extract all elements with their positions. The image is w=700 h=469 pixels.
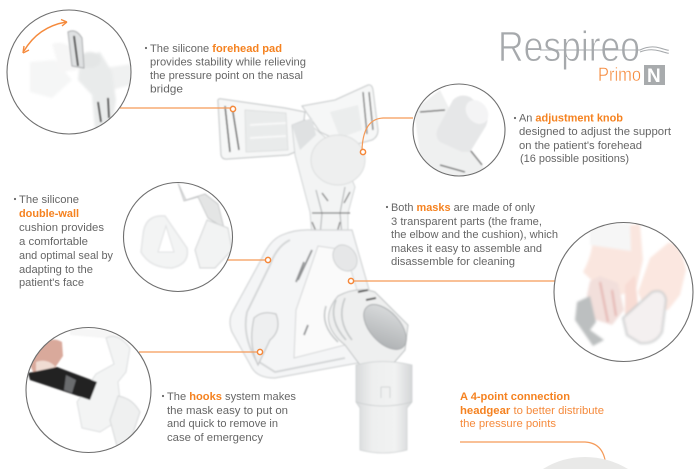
mask part: left forehead pad [218,99,305,159]
logo: Respireo Primo N: Primo [598,65,641,86]
text block: forehead pad [145,43,306,96]
photo circle: forehead pad [7,10,134,134]
text block: masks: disassemble for cleaning [391,256,515,268]
text block: headgear [460,391,604,430]
text block: double-wall cushion: double-wall [19,208,79,220]
connector line: forehead pad [120,106,236,112]
text block: double-wall cushion: adapting to the [19,264,93,276]
text block: forehead pad: bridge [150,84,183,96]
text block: masks [386,202,558,268]
text block: masks: 3 transparent parts (the frame, [391,216,542,228]
connector line: adjustment knob [360,118,413,155]
mask part: elbow [324,290,408,365]
text block: double-wall cushion: a comfortable [19,236,88,248]
mask part: forehead support column [292,118,355,236]
text block: adjustment knob: designed to adjust the support [519,126,671,138]
text block: headgear: A 4-point connection [460,391,570,403]
text block: hooks [162,391,296,444]
photo circle: double-wall cushion [124,182,232,292]
logo: Respireo Primo N: Respireo [498,23,640,71]
logo: Respireo Primo N: N [647,66,661,87]
text block: forehead pad: The silicone forehead pad [150,43,282,55]
main product: transparent nasal mask [218,85,414,453]
text block: forehead pad: provides stability while relieving [150,56,306,68]
mask part: right forehead pad [302,85,378,146]
mask part: adjustment knob [311,135,365,185]
icon: curved double arrow [23,20,67,53]
connector line: double-wall cushion [227,257,271,263]
text block: double-wall cushion: The silicone [19,194,79,206]
grey circle cropped at bottom edge [543,457,628,469]
text block: double-wall cushion [14,194,113,289]
mask part: exhaust vent plate [356,297,414,357]
text block: masks: the elbow and the cushion), which [391,229,558,241]
text block: hooks: The hooks system makes [167,391,296,403]
text block: hooks: and quick to remove in [167,418,278,430]
photo circle: hooks with hand and strap [26,328,151,452]
text block: hooks: the mask easy to put on [167,405,288,417]
text block: masks: makes it easy to assemble and [391,243,542,255]
text block: forehead pad: the pressure point on the nasal [150,70,303,82]
text block: double-wall cushion: and optimal seal by [19,250,113,262]
text block: adjustment knob: (16 possible positions) [520,153,629,165]
text block: adjustment knob: An adjustment knob [519,112,623,124]
mask part: swivel connector [356,362,412,453]
text block: masks: Both masks are made of only [391,202,535,214]
text block: double-wall cushion: cushion provides [19,222,105,234]
text block: adjustment knob [514,112,671,165]
text block: headgear: the pressure points [460,418,557,430]
text block: double-wall cushion: patient's face [19,277,84,289]
text block: headgear: headgear to better distribute [460,405,604,417]
connector line: masks [348,278,555,284]
photo circle: adjustment knob [413,84,505,178]
photo circle: hands holding disassembled mask [554,222,693,362]
connector line: hooks [139,349,263,355]
text block: adjustment knob: on the patient's forehead [519,140,642,152]
connector line: headgear [460,442,606,468]
mask part: frame and cushion [230,230,372,378]
text block: hooks: case of emergency [167,432,264,444]
